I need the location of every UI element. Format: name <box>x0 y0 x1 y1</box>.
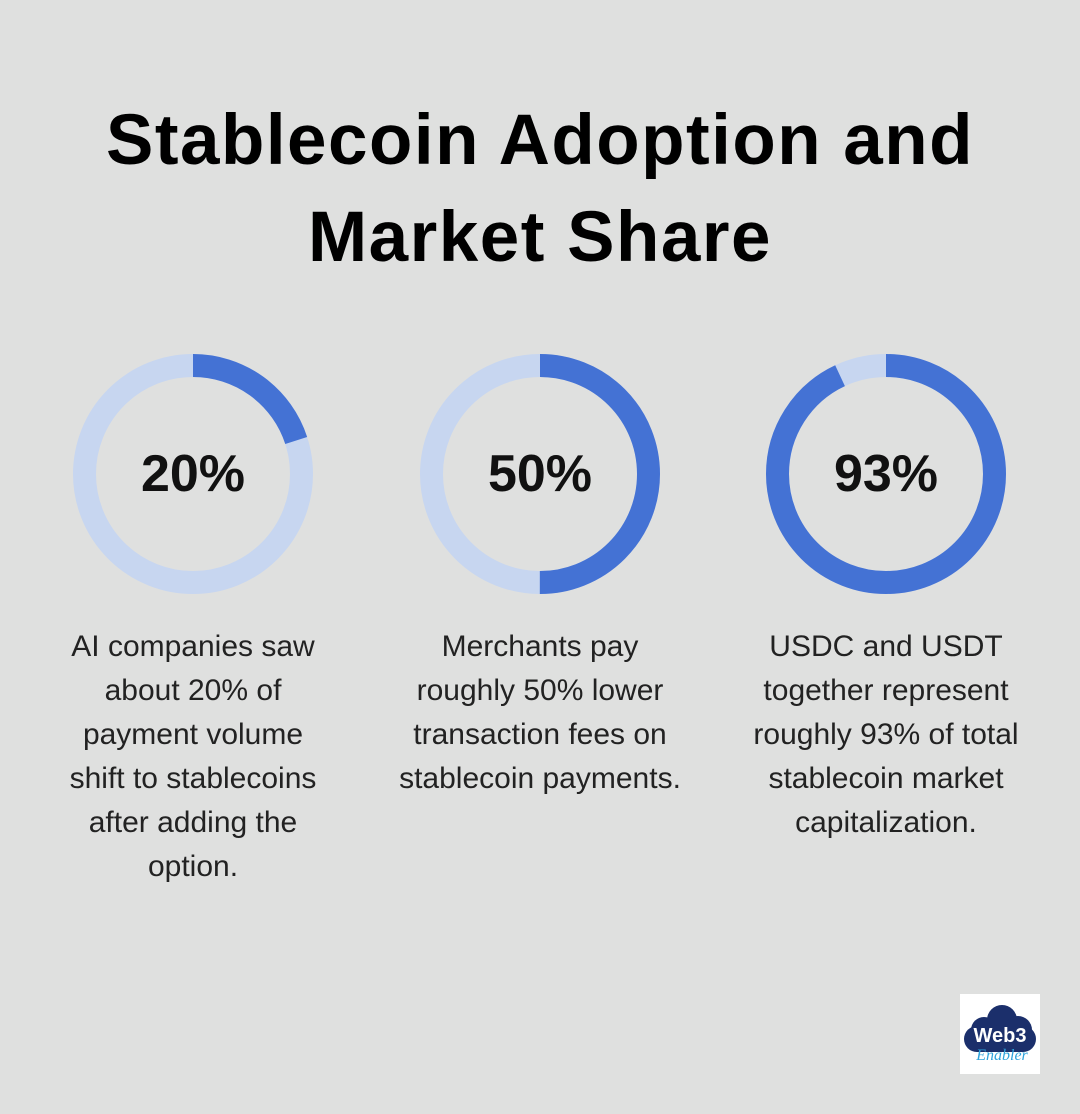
title: Market Share <box>308 198 772 277</box>
caption: USDC USDT <box>753 630 1019 839</box>
logo: Web3 Enabler <box>960 994 1040 1074</box>
caption: AI companies: AI companies saw <box>71 630 315 663</box>
donut: 93% <box>766 354 1006 594</box>
caption: AI companies <box>70 630 316 883</box>
donut: 20%: 20% <box>141 445 245 503</box>
logo: Web3 Enabler: Web3 <box>974 1025 1026 1047</box>
caption: merchants <box>399 630 681 795</box>
donut: 50% <box>420 354 660 594</box>
caption: AI companies: option. <box>148 850 238 883</box>
caption: merchants: roughly 50% lower <box>417 674 663 707</box>
caption: USDC USDT: USDC and USDT <box>769 630 1003 663</box>
caption: USDC USDT: capitalization. <box>795 806 977 839</box>
donut: 50%: 50% <box>488 445 592 503</box>
caption: USDC USDT: together represent <box>763 674 1009 707</box>
caption: AI companies: about 20% of <box>105 674 281 707</box>
title: Stablecoin Adoption and <box>106 101 974 180</box>
caption: merchants: stablecoin payments. <box>399 762 681 795</box>
logo: Web3 Enabler: Enabler <box>975 1047 1029 1064</box>
caption: merchants: transaction fees on <box>413 718 667 751</box>
caption: merchants: Merchants pay <box>442 630 638 663</box>
title <box>106 101 974 277</box>
caption: USDC USDT: roughly 93% of total <box>753 718 1019 751</box>
caption: AI companies: after adding the <box>89 806 297 839</box>
caption: USDC USDT: stablecoin market <box>768 762 1004 795</box>
donut: 93%: 93% <box>834 445 938 503</box>
caption: AI companies: shift to stablecoins <box>70 762 316 795</box>
caption: AI companies: payment volume <box>83 718 303 751</box>
donut: 20% <box>73 354 313 594</box>
